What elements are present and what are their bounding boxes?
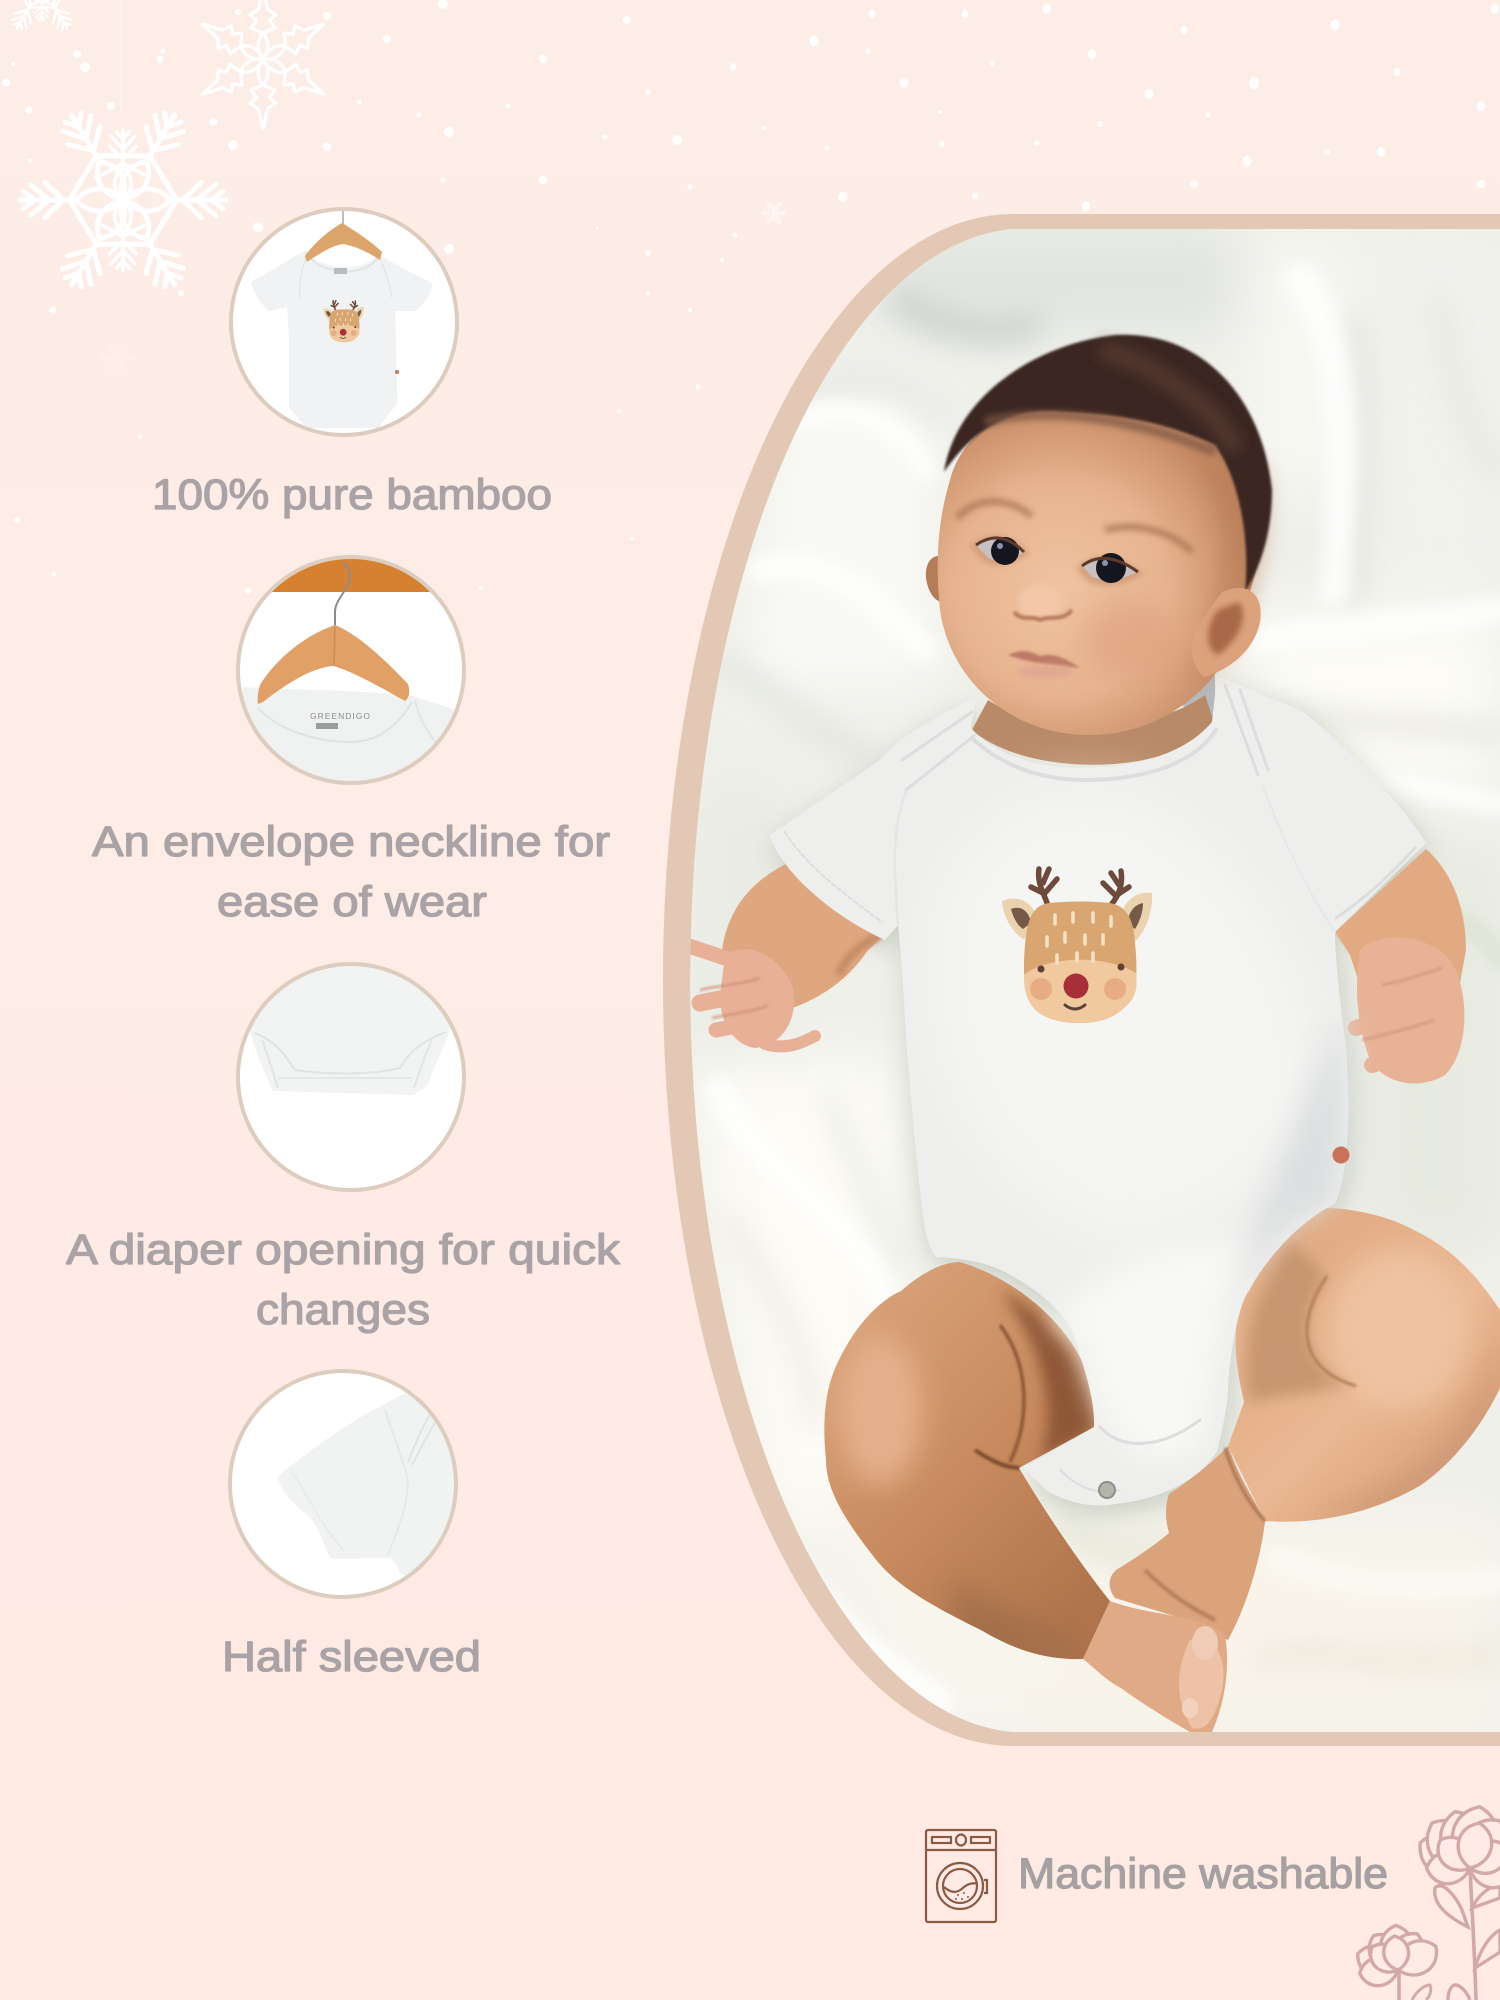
label: envelope neckline: [92, 818, 610, 926]
label: envelope neckline: An envelope neckline for: [92, 818, 610, 866]
mini bodysuit: [251, 250, 433, 428]
bodysuit snap area: [250, 960, 450, 1095]
hook: [335, 562, 350, 626]
deer print: [1002, 869, 1152, 1023]
right arm: [1336, 849, 1466, 982]
snap button: [1099, 1482, 1115, 1498]
mouth: [1008, 651, 1080, 679]
right leg: [1228, 1208, 1500, 1522]
snowflake cropped top left: [0, 0, 92, 35]
sleeve: [277, 1392, 470, 1600]
icon: washing machine: [926, 1830, 996, 1922]
label: diaper opening: changes: [256, 1286, 430, 1334]
right ear: [1192, 588, 1261, 677]
left leg: [824, 1262, 1110, 1670]
label: envelope neckline: ease of wear: [217, 878, 487, 926]
right hand: [1356, 938, 1464, 1083]
label: diaper opening: [66, 1226, 621, 1334]
right eye: [1076, 553, 1144, 586]
head: [926, 335, 1272, 735]
feature circle: half sleeve: [230, 1371, 470, 1600]
mini label: [334, 268, 347, 274]
label: diaper opening: A diaper opening for quick: [66, 1226, 621, 1274]
feature circle: envelope neckline: [230, 556, 470, 800]
nose: [1014, 585, 1072, 620]
photo frame: [663, 214, 1500, 1746]
snowflake faint: [99, 340, 135, 376]
baby photo: [660, 220, 1500, 1740]
feature circle: full bodysuit on hanger: [231, 208, 457, 435]
snowflake large: [20, 0, 226, 299]
logo patch: [1332, 1146, 1350, 1164]
hanger: [305, 208, 382, 262]
foot lower: [1083, 1601, 1227, 1732]
label: machine washable: Machine washable: [1018, 1850, 1388, 1898]
mini deer: [323, 301, 364, 342]
snowflake small: [762, 201, 786, 225]
onesie: [770, 676, 1426, 1506]
label: 100% pure bamboo: 100% pure bamboo: [152, 471, 552, 519]
hair: [944, 335, 1272, 592]
label: half sleeved: Half sleeved: [222, 1633, 481, 1681]
wooden rail: [230, 556, 470, 592]
neck: [972, 695, 1214, 765]
left arm: [722, 864, 884, 1008]
blanket: [660, 220, 1500, 1740]
bodysuit: [230, 687, 470, 800]
body shadow: [773, 684, 1429, 1514]
snowflake medium: [196, 0, 330, 129]
flower decoration: short flower: [1352, 1925, 1444, 2000]
flower decoration: tall flower: [1411, 1803, 1500, 2000]
foot upper: [1110, 1446, 1265, 1640]
left ear: [926, 556, 941, 602]
left eye: [970, 535, 1030, 565]
left hand: [689, 946, 815, 1048]
side tag: [395, 370, 399, 374]
eyebrows: [957, 502, 1192, 552]
feature circle: diaper opening: [238, 960, 464, 1190]
snowfall decoration: [2, 0, 1499, 594]
neck label: GREENDIGO: [310, 711, 371, 721]
shoulder shadow: [1182, 675, 1215, 717]
hanger: [258, 625, 409, 704]
face: [938, 390, 1263, 735]
